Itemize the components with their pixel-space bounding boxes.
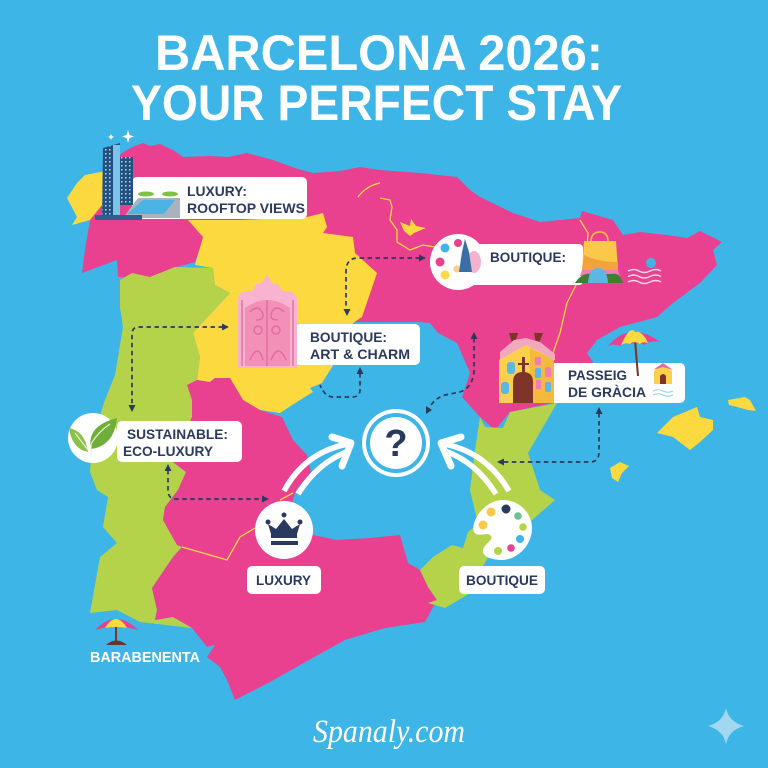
label: boutique with palette: BOUTIQUE: [490,249,566,265]
region: northern pink [82,143,722,430]
icon: small church and waves [653,363,673,396]
label: Passeig de Gracia [545,363,685,403]
label: boutique: BOUTIQUE [466,572,538,588]
text: Spanaly.com footer: Spanaly.com [313,714,465,750]
icon: small beach umbrella [95,619,138,645]
arrow: dotted door to sustainable [128,324,229,412]
icon: artist palette [473,500,532,560]
icon: shopping bag and tent [575,232,623,283]
region: central yellow [188,213,377,413]
text: Barabenenta: BARABENENTA [90,649,200,666]
title [131,25,622,131]
icon: pink ornate door [238,275,297,368]
label: boutique art and charm: BOUTIQUE: [310,329,387,345]
icon: hotel towers and pool [95,130,180,220]
title: YOUR PERFECT STAY [131,75,622,131]
arrow: dotted top boutique to yellow [344,254,426,316]
rivers [182,183,588,560]
region: Valencia and Murcia green [420,403,557,608]
label: luxury: LUXURY [256,572,312,588]
arrow: boutique to question [441,437,509,494]
label: boutique art and charm [295,324,420,365]
label: boutique art and charm: ART & CHARM [310,346,410,362]
icon: green leaves [68,413,118,463]
label: Passeig de Gracia: DE GRÀCIA [568,384,646,400]
region: Portugal green [90,267,230,628]
arrow: luxury to question [284,437,351,494]
arrow: dotted sustainable to luxury [164,464,269,502]
icon: yellow church [499,333,555,403]
icon: crown [255,501,313,559]
label: sustainable eco-luxury [117,421,242,462]
label: sustainable eco-luxury: ECO-LUXURY [123,443,214,459]
title: BARCELONA 2026: [155,25,603,81]
label: luxury rooftop views: LUXURY: [187,183,247,199]
label: luxury rooftop views [132,177,307,219]
map of Spain and Portugal [67,143,756,700]
region: southern pink [152,378,437,700]
label: sustainable eco-luxury: SUSTAINABLE: [127,426,228,442]
label: boutique [459,566,545,594]
label: boutique with palette [458,244,583,285]
icon: sea waves and sun [628,258,661,284]
label: luxury [247,566,321,594]
icon: sparkle [708,708,744,744]
label: luxury rooftop views: ROOFTOP VIEWS [187,200,305,216]
label: Passeig de Gracia: PASSEIG [568,367,627,383]
icon: question mark: ? [384,423,408,465]
arrow: dotted to question [426,332,478,414]
region: Galicia yellow [67,171,106,225]
lake [400,219,426,236]
icon: question mark [362,409,430,477]
arrow: dotted art and charm to coast [320,367,364,397]
region: Balearic islands [610,397,756,482]
icon: palette with tower [430,234,486,290]
arrow: dotted Valencia to Passeig [497,407,602,466]
icon: beach umbrella [608,330,660,376]
